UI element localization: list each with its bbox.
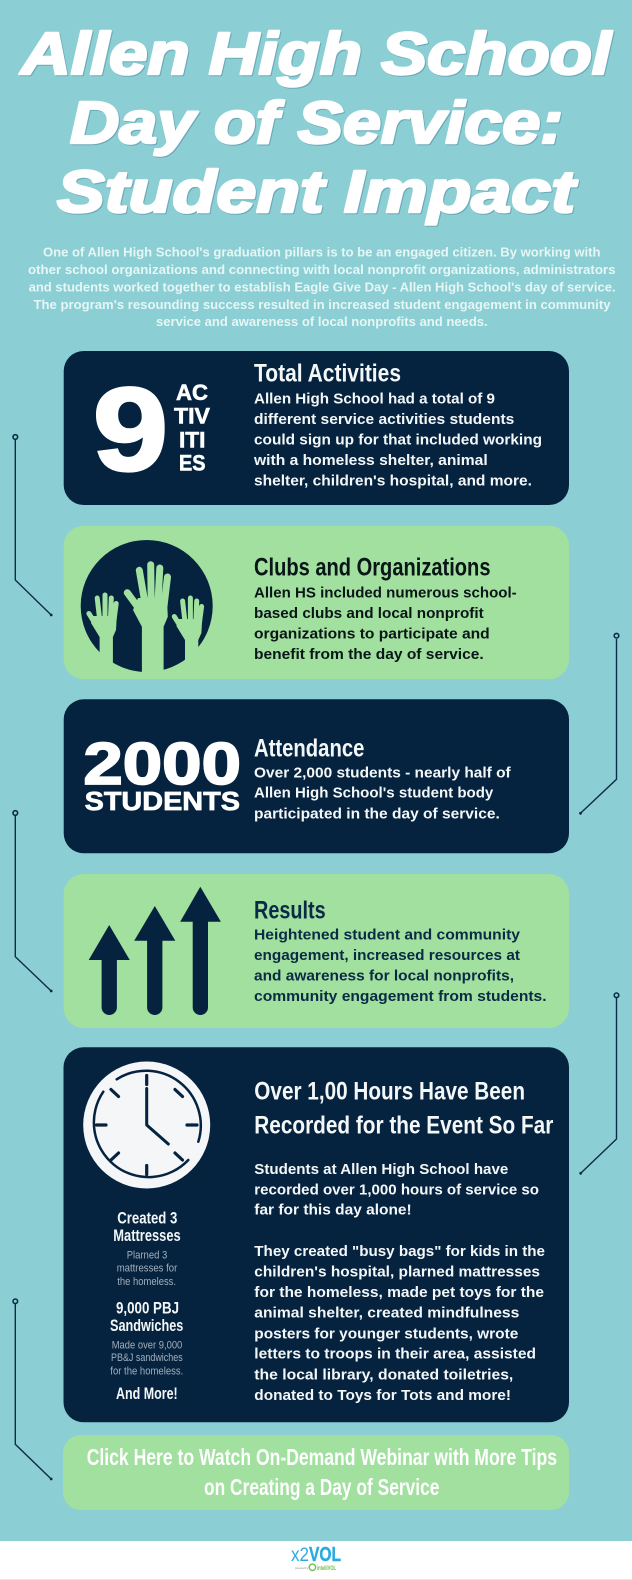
logo: x2VOL: powered by (295, 1566, 308, 1570)
stat: mattresses: Mattresses (113, 1226, 181, 1245)
body text: Allen High School's student body (254, 785, 494, 802)
icon: three rising arrows (89, 887, 221, 1015)
heading: Recorded for the Event So Far (254, 1111, 554, 1139)
body text: participated in the day of service. (254, 805, 500, 822)
body text: They created "busy bags" for kids in the (254, 1243, 545, 1260)
panel: attendance (64, 699, 569, 853)
stat: mattresses: Created 3 (117, 1208, 177, 1227)
stat: sandwiches: Sandwiches (110, 1316, 183, 1335)
icon: raised hands (81, 540, 213, 672)
body text: engagement, increased resources at (254, 947, 520, 964)
stat: mattresses: Plarned 3 (127, 1249, 167, 1261)
body text: Over 2,000 students - nearly half of (254, 764, 512, 781)
body text: Allen HS included numerous school- (254, 584, 517, 601)
connector: left 1 (13, 435, 53, 616)
stat: sandwiches: for the homeless. (110, 1365, 183, 1377)
logo: x2VOL: VOL (309, 1544, 341, 1566)
stat: sandwiches: 9,000 PBJ (116, 1298, 179, 1317)
intro paragraph (28, 245, 616, 329)
stat: mattresses: mattresses for (117, 1263, 178, 1275)
body text (253, 390, 542, 489)
intro paragraph: service and awareness of local nonprofits and needs. (156, 314, 488, 329)
body text: could sign up for that included working (254, 431, 542, 448)
body text: recorded over 1,000 hours of service so (254, 1181, 539, 1198)
heading: Attendance (254, 735, 364, 763)
body text (254, 584, 517, 663)
activities stacked label: TIV (174, 403, 210, 428)
body text (254, 1161, 545, 1404)
body text: based clubs and local nonprofit (254, 605, 484, 622)
footer band with logo (0, 1541, 632, 1580)
big number 9: 9 (93, 364, 168, 496)
body text: children's hospital, plarned mattresses (254, 1264, 540, 1281)
big number 2000 students: STUDENTS (85, 788, 240, 816)
panel: hours recorded (64, 1047, 569, 1422)
big number 2000 students (83, 731, 241, 816)
connector: left 2 (13, 811, 53, 992)
body text: posters for younger students, wrote (254, 1325, 518, 1342)
body text: Students at Allen High School have (254, 1161, 508, 1178)
intro paragraph: One of Allen High School's graduation pillars is to be an engaged citizen. By working with (43, 245, 601, 260)
stat: mattresses (113, 1208, 181, 1288)
activities stacked label (174, 380, 210, 476)
button: webinar call to action (63, 1435, 569, 1510)
button: webinar call to action: on Creating a Day of Service (204, 1474, 439, 1500)
body text: donated to Toys for Tots and more! (254, 1387, 511, 1404)
intro paragraph: The program's resounding success resulted in increased student engagement in community (34, 297, 611, 312)
icon: clock (83, 1062, 210, 1188)
activities stacked label: ITI (179, 427, 206, 452)
title: Student Impact (57, 159, 578, 225)
intro paragraph: and students worked together to establish Eagle Give Day - Allen High School's day of service. (29, 280, 616, 295)
body text: Heightened student and community (254, 926, 521, 943)
body text: different service activities students (254, 411, 514, 428)
intro paragraph: other school organizations and connecting with local nonprofit organizations, administrators (28, 262, 616, 277)
stat: mattresses: the homeless. (117, 1276, 176, 1288)
stat: sandwiches (110, 1298, 183, 1377)
connector: left 3 (13, 1299, 53, 1480)
logo: x2VOL: intelliVOL (317, 1565, 336, 1572)
body text: with a homeless shelter, animal (253, 452, 488, 469)
title: Allen High School (19, 21, 613, 87)
logo: x2VOL: x2 (291, 1545, 309, 1566)
body text: community engagement from students. (254, 988, 547, 1005)
title (19, 21, 613, 225)
body text (254, 926, 547, 1005)
heading: Results (254, 896, 326, 924)
body text: for the homeless, made pet toys for the (254, 1284, 544, 1301)
body text: animal shelter, created mindfulness (254, 1305, 519, 1322)
stat: and more: And More! (116, 1384, 178, 1403)
body text: shelter, children's hospital, and more. (254, 472, 532, 489)
heading: Total Activities (254, 360, 401, 388)
panel: clubs and organizations (64, 526, 569, 679)
heading: Over 1,00 Hours Have Been (254, 1077, 525, 1105)
panel: results (64, 874, 569, 1028)
heading (254, 1077, 554, 1139)
stat: sandwiches: PB&J sandwiches (111, 1352, 183, 1364)
body text (254, 764, 512, 822)
panel: total activities (64, 351, 569, 505)
body text: far for this day alone! (254, 1202, 412, 1219)
body text: Allen High School had a total of 9 (254, 390, 495, 407)
connector: right 2 (579, 993, 619, 1175)
body text: letters to troops in their area, assisted (254, 1346, 536, 1363)
logo: x2VOL (291, 1544, 341, 1572)
connector: right 1 (579, 633, 619, 815)
heading: Clubs and Organizations (254, 554, 490, 582)
body text: and awareness for local nonprofits, (254, 968, 514, 985)
stat: sandwiches: Made over 9,000 (112, 1339, 182, 1351)
body text: benefit from the day of service. (254, 646, 484, 663)
body text: the local library, donated toiletries, (254, 1366, 513, 1383)
title: Day of Service: (70, 90, 563, 156)
activities stacked label: AC (176, 380, 208, 405)
body text: organizations to participate and (254, 626, 490, 643)
activities stacked label: ES (179, 451, 206, 476)
big number 2000 students: 2000 (83, 731, 241, 797)
